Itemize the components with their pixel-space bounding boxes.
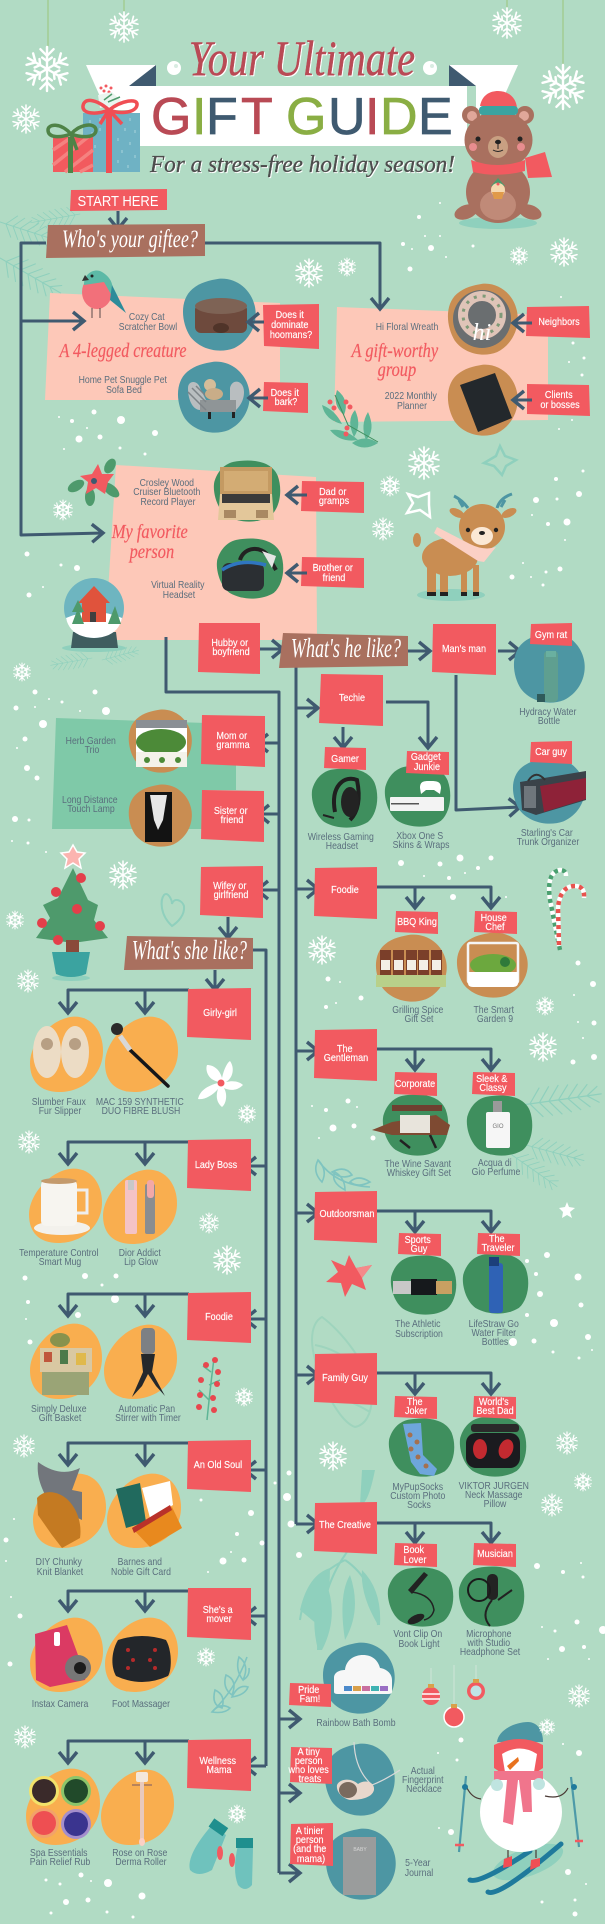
- tag: Sports Guy: Sports: [405, 1235, 431, 1246]
- caption: Starling's Car Trunk Organizer: Starling's Car: [521, 827, 573, 838]
- product: The Wine Savant Whiskey Gift Set: [372, 1072, 454, 1178]
- red box: Outdoorsman: [314, 1191, 377, 1243]
- red box: Does it bark?: [249, 382, 308, 413]
- red box: Does it dominate hoomans?: dominate: [271, 320, 308, 331]
- caption: Actual Fingerprint Necklace: Necklace: [406, 1783, 442, 1794]
- icon: holly sprig: [322, 390, 378, 448]
- caption: LifeStraw Go Water Filter Bottles: LifeStraw Go: [469, 1318, 519, 1329]
- icon: snowman on skis: [455, 1719, 583, 1893]
- tag: Gadget Junkie: Junkie: [414, 762, 440, 773]
- tag: START HERE: [70, 189, 167, 211]
- caption: Temperature Control Smart Mug: Temperature Control: [19, 1247, 98, 1258]
- heading: a gift-worthy group: group: [378, 359, 416, 380]
- caption: Herb Garden Trio: Herb Garden: [66, 735, 116, 746]
- tag: The Joker: Joker: [405, 1406, 428, 1417]
- red box: Family Guy: [314, 1353, 377, 1405]
- product: VIKTOR JURGEN Neck Massage Pillow: [459, 1396, 531, 1509]
- subtitle: For a stress-free holiday season!: [149, 152, 455, 178]
- title: GIFT GUIDE: G: [286, 88, 326, 146]
- title: GIFT GUIDE: F: [206, 88, 238, 146]
- caption: Hydracy Water Bottle: Hydracy Water: [519, 706, 576, 717]
- tag: Book Lover: Lover: [404, 1555, 427, 1566]
- tag: The Joker: The: [407, 1397, 423, 1408]
- red box: Girly-girl: Girly-girl: [203, 1008, 237, 1019]
- product: MyPupSocks Custom Photo Socks: [389, 1396, 454, 1510]
- caption: The Smart Garden 9: The Smart: [474, 1004, 514, 1015]
- red box: She's a mover: She's a: [203, 1605, 233, 1616]
- tag: A tiny person who loves treats: person: [295, 1756, 323, 1767]
- caption: Herb Garden Trio: Trio: [85, 744, 99, 755]
- heading: What's he like?: [279, 633, 408, 668]
- caption: Home Pet Snuggle Pet Sofa Bed: Home Pet Snuggle Pet: [79, 374, 167, 385]
- product: Crosley record player: [214, 460, 280, 522]
- tag: A tiny person who loves treats: treats: [299, 1774, 321, 1785]
- caption: Xbox One S Skins and Wraps: Xbox One S: [396, 830, 443, 841]
- product: Long Distance Touch Lamp: [129, 785, 192, 847]
- product: Microphone with Studio Headphone Set: [459, 1543, 524, 1657]
- tag: Car guy: Car guy: [535, 747, 567, 758]
- tag: Sleek and Classy: Sleek &: [476, 1074, 508, 1085]
- red box: Wellness Mama: Wellness: [199, 1756, 236, 1767]
- caption: Simply Deluxe Gift Basket: Gift Basket: [39, 1412, 82, 1423]
- product: Starling's Car Trunk Organizer: [513, 741, 586, 847]
- caption: Slumber Faux Fur Slipper: Fur Slipper: [39, 1105, 81, 1116]
- icon: mittens: [189, 1818, 253, 1889]
- caption: Vont Clip On Book Light: Vont Clip On: [393, 1628, 442, 1639]
- product: Slumber Faux Fur Slipper: [30, 1017, 103, 1116]
- red box: Clients or bosses: Clients: [545, 390, 573, 401]
- title: GIFT GUIDE: I: [365, 88, 379, 146]
- red box: Man's man: Man's man: [442, 644, 486, 655]
- caption: Hi Floral Wreath: Hi Floral Wreath: [376, 321, 438, 332]
- red box: Sister or friend: [201, 790, 264, 842]
- caption: Barnes and Noble Gift Card: Noble Gift Card: [111, 1566, 171, 1577]
- caption: Barnes and Noble Gift Card: Barnes and: [118, 1556, 162, 1567]
- caption: Automatic Pan Stirrer with Timer: Automatic Pan: [119, 1403, 175, 1414]
- red box: She's a mover: mover: [206, 1614, 232, 1625]
- tag: The Traveler: Traveler: [482, 1243, 515, 1254]
- caption: Vont Clip On Book Light: Book Light: [398, 1638, 440, 1649]
- caption: MyPupSocks Custom Photo Socks: Custom Photo: [390, 1490, 445, 1501]
- caption: Instax Camera: Instax Camera: [32, 1698, 89, 1709]
- tag: A tinier person (and the mama): (and the: [293, 1844, 326, 1855]
- heading: What's she like?: [124, 935, 253, 970]
- heading: Who's your giftee?: [46, 224, 205, 258]
- icon: red poinsettia: [326, 1255, 372, 1297]
- tag: A tinier person (and the mama): person: [296, 1835, 324, 1846]
- tag: START HERE: START HERE: [78, 193, 158, 210]
- caption: Wireless Gaming Headset: Headset: [326, 840, 359, 851]
- icon: candy canes: [549, 870, 584, 950]
- caption: Automatic Pan Stirrer with Timer: Stirrer with Timer: [115, 1412, 181, 1423]
- product: Instax Camera: [30, 1618, 103, 1709]
- icon: outline stars: [407, 446, 516, 517]
- caption: Crosley Wood Cruiser Bluetooth Record Player: Record Player: [140, 496, 196, 507]
- caption: Rose on Rose Derma Roller: Rose on Rose: [112, 1847, 167, 1858]
- heading: a 4-legged creature: A 4-legged creature: [58, 340, 187, 362]
- product: Rainbow Bath Bomb: [289, 1643, 396, 1728]
- caption: LifeStraw Go Water Filter Bottles: Bottles: [482, 1336, 509, 1347]
- icon: christmas tree: [36, 845, 108, 981]
- red box: Wifey or girlfriend: girlfriend: [214, 890, 248, 901]
- caption: Hydracy Water Bottle: Bottle: [538, 715, 560, 726]
- flow connectors: [21, 211, 520, 1873]
- tag: Gamer: Gamer: [331, 754, 360, 765]
- tag: Gadget Junkie: [406, 751, 449, 775]
- tag: World's Best Dad: World's: [479, 1397, 509, 1408]
- hanging ornament strings: [48, 0, 563, 1707]
- caption: Virtual Reality Headset: Virtual Reality: [151, 579, 205, 590]
- product: Herb Garden Trio: [129, 710, 192, 773]
- caption: VIKTOR JURGEN Neck Massage Pillow: Neck Massage: [465, 1489, 523, 1500]
- panel: mom or sister gifts: [52, 718, 236, 829]
- red box: Brother or friend: Brother or: [313, 563, 354, 574]
- red box: Foodie (he): Foodie: [331, 885, 359, 896]
- red box: Wellness Mama: Mama: [206, 1765, 232, 1776]
- red box: Mom or gramma: Mom or: [216, 731, 248, 742]
- tag: A tinier person (and the mama): A tinier: [296, 1826, 324, 1837]
- icon: white flower: [198, 1061, 243, 1107]
- red box: An Old Soul: An Old Soul: [194, 1460, 242, 1471]
- red box: Family Guy: Family Guy: [322, 1373, 368, 1384]
- heading: What's she like?: What's she like?: [132, 935, 247, 965]
- red box: The Creative: The Creative: [319, 1520, 371, 1531]
- caption: Home Pet Snuggle Pet Sofa Bed: Sofa Bed: [106, 384, 142, 395]
- caption: The Wine Savant Whiskey Gift Set: Whiskey Gift Set: [387, 1167, 451, 1178]
- tag: A tinier person (and the mama): mama): [297, 1854, 325, 1865]
- product: Acqua di Gio Perfume: [467, 1072, 532, 1177]
- tag: The Traveler: The: [489, 1234, 505, 1245]
- red box: Sister or friend: friend: [221, 815, 243, 826]
- tag: Pride Fam!: Fam!: [300, 1694, 320, 1705]
- product: 2022 Monthly Planner: [448, 365, 518, 436]
- red box: Clients or bosses: or bosses: [540, 400, 580, 411]
- red box: Neighbors: [513, 306, 590, 338]
- tag: Gym rat: Gym rat: [535, 630, 567, 641]
- banner ribbon: [86, 61, 518, 146]
- icon: heart outline: [162, 894, 184, 926]
- tag: Sleek and Classy: Classy: [479, 1083, 507, 1094]
- red box: Brother or friend: [287, 557, 364, 588]
- product: Simply Deluxe Gift Basket: [30, 1324, 102, 1423]
- product: Automatic Pan Stirrer with Timer: [104, 1325, 181, 1423]
- caption: 2022 Monthly Planner: Planner: [397, 400, 427, 411]
- caption: Actual Fingerprint Necklace: Actual: [411, 1765, 435, 1776]
- heading: a gift-worthy group: A gift-worthy: [351, 340, 439, 361]
- icon: berry sprig: [196, 1357, 221, 1420]
- caption: The Wine Savant Whiskey Gift Set: The Wine Savant: [384, 1158, 451, 1169]
- product: Wireless Gaming Headset: [308, 747, 377, 851]
- product: Temperature Control Smart Mug: [19, 1169, 102, 1267]
- red box: Outdoorsman: Outdoorsman: [320, 1209, 374, 1220]
- red box: Wellness Mama: [187, 1739, 251, 1791]
- caption: MAC 159 SYNTHETIC DUO FIBRE BLUSH: DUO FIBRE BLUSH: [102, 1105, 180, 1116]
- tag: World's Best Dad: [473, 1396, 516, 1419]
- caption: Dior Addict Lip Glow: Lip Glow: [124, 1256, 158, 1267]
- product: Barnes and Noble Gift Card: [107, 1474, 182, 1577]
- caption: Grilling Spice Gift Set: Gift Set: [405, 1013, 434, 1024]
- caption: Slumber Faux Fur Slipper: Slumber Faux: [32, 1096, 86, 1107]
- red box: Girly-girl: [187, 988, 251, 1040]
- product: Acqua di Gio Perfume: GIO: [492, 1124, 504, 1130]
- red box: Man's man: [432, 624, 496, 675]
- title: GIFT GUIDE: G: [151, 88, 191, 146]
- icon: hanging ornaments: [422, 1679, 485, 1727]
- red box: Mom or gramma: [201, 715, 265, 767]
- caption: MyPupSocks Custom Photo Socks: MyPupSocks: [392, 1481, 443, 1492]
- product: 5-Year Journal: BABY: [353, 1847, 367, 1853]
- caption: 5-Year Journal: Journal: [405, 1867, 433, 1878]
- caption: Starling's Car Trunk Organizer: Trunk Organizer: [517, 836, 579, 847]
- heading: my favorite person: My favorite: [111, 521, 188, 542]
- product: Hydracy Water Bottle: [514, 623, 585, 726]
- tag: House Chef: Chef: [485, 922, 505, 933]
- red box: Hubby or boyfriend: [198, 623, 260, 674]
- heading: What's he like?: What's he like?: [291, 633, 401, 663]
- caption: Microphone with Studio Headphone Set: Microphone: [466, 1628, 512, 1639]
- tag: Sports Guy: [398, 1233, 441, 1256]
- tag: House Chef: [474, 911, 517, 934]
- product: The Athletic Subscription: [391, 1233, 456, 1339]
- caption: Microphone with Studio Headphone Set: with Studio: [467, 1637, 510, 1648]
- red box: Dad or gramps: Dad or: [319, 487, 347, 498]
- tag: A tinier person (and the mama): [290, 1823, 333, 1866]
- product: 5-Year Journal: [290, 1823, 433, 1900]
- caption: Wireless Gaming Headset: Wireless Gaming: [308, 831, 374, 842]
- caption: Spa Essentials Pain Relief Rub: Pain Relief Rub: [30, 1856, 90, 1867]
- product: Virtual Reality Headset: [217, 538, 283, 599]
- red box: Techie: [319, 674, 383, 726]
- caption: The Smart Garden 9: Garden 9: [477, 1013, 513, 1024]
- red box: The Gentleman: [314, 1029, 377, 1081]
- caption: Rainbow Bath Bomb: Rainbow Bath Bomb: [316, 1717, 396, 1728]
- product: Foot Massager: [105, 1618, 178, 1709]
- icon: gift boxes: [48, 84, 140, 173]
- caption: VIKTOR JURGEN Neck Massage Pillow: VIKTOR JURGEN: [459, 1480, 529, 1491]
- caption: The Athletic Subscription: Subscription: [395, 1328, 443, 1339]
- red box: Foodie (she): [187, 1292, 251, 1343]
- title: GIFT GUIDE: U: [328, 88, 366, 146]
- tag: Book Lover: Book: [403, 1545, 424, 1556]
- title: GIFT GUIDE: T: [241, 88, 272, 146]
- caption: DIY Chunky Knit Blanket: Knit Blanket: [37, 1566, 84, 1577]
- title: GIFT GUIDE: E: [418, 88, 453, 146]
- red box: Hubby or boyfriend: boyfriend: [212, 647, 250, 658]
- icon: poinsettia: [66, 457, 122, 506]
- decorative pine and leaf branches: [0, 205, 603, 1713]
- product: Dior Addict Lip Glow: [103, 1170, 177, 1267]
- caption: Dior Addict Lip Glow: Dior Addict: [119, 1247, 161, 1258]
- caption: Long Distance Touch Lamp: Touch Lamp: [67, 803, 115, 814]
- icon: white star: [559, 1202, 575, 1218]
- tag: A tiny person who loves treats: who loves: [288, 1765, 329, 1776]
- red box: Dad or gramps: gramps: [319, 496, 349, 507]
- icon: bear with hat and scarf: [452, 91, 552, 229]
- title: GIFT GUIDE: I: [192, 88, 206, 146]
- caption: 2022 Monthly Planner: 2022 Monthly: [385, 390, 437, 401]
- product: Cozy Cat Scratcher Bowl: [183, 279, 256, 351]
- red box: She's a mover: [187, 1588, 251, 1640]
- tag: Pride Fam!: [289, 1683, 331, 1707]
- red box: Mom or gramma: gramma: [216, 740, 250, 751]
- tag: Gadget Junkie: Gadget: [411, 752, 441, 763]
- red box: Does it dominate hoomans?: Does it: [276, 310, 304, 321]
- tag: A tiny person who loves treats: [288, 1747, 332, 1785]
- caption: Microphone with Studio Headphone Set: Headphone Set: [460, 1646, 521, 1657]
- product: Spa Essentials Pain Relief Rub: [26, 1769, 100, 1867]
- caption: Acqua di Gio Perfume: Gio Perfume: [472, 1166, 520, 1177]
- red box: An Old Soul: [187, 1440, 251, 1492]
- product: Hi Floral Wreath: hi: [473, 320, 491, 346]
- red box: Wifey or girlfriend: [200, 866, 263, 918]
- red box: Does it dominate hoomans?: [248, 304, 319, 349]
- tag: A tiny person who loves treats: A tiny: [298, 1747, 320, 1758]
- tag: World's Best Dad: Best Dad: [476, 1406, 514, 1417]
- heading: my favorite person: person: [128, 541, 174, 562]
- tag: Corporate: Corporate: [395, 1079, 435, 1090]
- product: Actual Fingerprint Necklace: [288, 1742, 446, 1816]
- product: LifeStraw Go Water Filter Bottles: [463, 1233, 528, 1347]
- caption: VIKTOR JURGEN Neck Massage Pillow: Pillow: [484, 1498, 507, 1509]
- tag: The Joker: [394, 1396, 437, 1419]
- caption: Simply Deluxe Gift Basket: Simply Deluxe: [31, 1403, 87, 1414]
- product: Grilling Spice Gift Set: [376, 911, 447, 1024]
- product: Rose on Rose Derma Roller: [101, 1770, 174, 1867]
- title: GIFT GUIDE: D: [380, 88, 418, 146]
- tag: Sports Guy: Guy: [411, 1244, 427, 1255]
- icon: snow globe: [49, 578, 140, 673]
- caption: Grilling Spice Gift Set: Grilling Spice: [392, 1004, 443, 1015]
- panel: a 4-legged creature: [45, 293, 280, 400]
- caption: Foot Massager: Foot Massager: [112, 1698, 170, 1709]
- caption: The Athletic Subscription: The Athletic: [395, 1318, 441, 1329]
- caption: DIY Chunky Knit Blanket: DIY Chunky: [36, 1556, 82, 1567]
- caption: MAC 159 SYNTHETIC DUO FIBRE BLUSH: MAC 159 SYNTHETIC: [96, 1096, 184, 1107]
- panel: my favorite person: [105, 465, 317, 640]
- caption: Spa Essentials Pain Relief Rub: Spa Essentials: [30, 1847, 88, 1858]
- product: The Smart Garden 9: [457, 911, 528, 1024]
- caption: Crosley Wood Cruiser Bluetooth Record Player: Cruiser Bluetooth: [133, 486, 200, 497]
- red box: Sister or friend: Sister or: [214, 806, 248, 817]
- product: MAC 159 Synthetic Duo Fibre Blush: [96, 1017, 186, 1116]
- caption: 5-Year Journal: 5-Year: [405, 1857, 430, 1868]
- icon: parrot: [82, 271, 126, 318]
- red box: Techie: Techie: [339, 693, 365, 704]
- red box: Lady Boss: Lady Boss: [195, 1160, 237, 1171]
- caption: Cozy Cat Scratcher Bowl: Cozy Cat: [129, 311, 165, 322]
- tag: Musician: Musician: [477, 1549, 513, 1560]
- caption: Long Distance Touch Lamp: Long Distance: [62, 794, 118, 805]
- red box: Wifey or girlfriend: Wifey or: [213, 881, 247, 892]
- product: Home Pet Snuggle Pet Sofa Bed: [178, 362, 250, 433]
- red box: Does it bark?: Does it: [271, 388, 299, 399]
- red box: Foodie (she): Foodie: [205, 1312, 233, 1323]
- red box: Neighbors: Neighbors: [538, 317, 580, 328]
- red box: The Creative: [314, 1502, 377, 1554]
- red box: The Gentleman: Gentleman: [324, 1053, 368, 1064]
- tag: The Traveler: [477, 1233, 520, 1256]
- product: Xbox One S Skins and Wraps: [385, 751, 450, 850]
- panel: a gift-worthy group: [334, 307, 548, 422]
- red box: Brother or friend: friend: [323, 573, 345, 584]
- product: DIY Chunky Knit Blanket: [33, 1462, 106, 1577]
- red box: Dad or gramps: [287, 481, 364, 513]
- caption: Virtual Reality Headset: Headset: [163, 589, 196, 600]
- product: Vont Clip On Book Light: [388, 1543, 453, 1649]
- caption: Temperature Control Smart Mug: Smart Mug: [39, 1256, 81, 1267]
- red box: Lady Boss: [187, 1139, 251, 1191]
- tag: BBQ King: BBQ King: [397, 917, 437, 928]
- red box: The Gentleman: The: [337, 1044, 353, 1055]
- heading: Who's your giftee?: Who's your giftee?: [62, 226, 198, 253]
- red box: Hubby or boyfriend: Hubby or: [211, 638, 249, 649]
- caption: MyPupSocks Custom Photo Socks: Socks: [407, 1499, 431, 1510]
- red box: Does it dominate hoomans?: hoomans?: [270, 330, 312, 341]
- red box: Does it bark?: bark?: [275, 397, 297, 408]
- caption: Cozy Cat Scratcher Bowl: Scratcher Bowl: [119, 321, 177, 332]
- product: Hi Floral Wreath: [448, 284, 518, 355]
- tag: Sleek and Classy: [472, 1072, 515, 1096]
- tag: Pride Fam!: Pride: [298, 1685, 319, 1696]
- caption: Crosley Wood Cruiser Bluetooth Record Player: Crosley Wood: [140, 477, 194, 488]
- icon: deer with scarf: [413, 494, 518, 601]
- red box: Clients or bosses: [513, 384, 590, 416]
- tag: House Chef: House: [481, 913, 507, 924]
- tag: Book Lover: [394, 1543, 437, 1567]
- caption: Actual Fingerprint Necklace: Fingerprint: [402, 1774, 444, 1785]
- caption: Rose on Rose Derma Roller: Derma Roller: [115, 1856, 167, 1867]
- title: Your Ultimate: Your Ultimate: [189, 30, 415, 86]
- caption: LifeStraw Go Water Filter Bottles: Water Filter: [472, 1327, 516, 1338]
- red box: Foodie (he): [314, 867, 377, 919]
- caption: Acqua di Gio Perfume: Acqua di: [478, 1157, 512, 1168]
- caption: Xbox One S Skins and Wraps: Skins & Wraps: [393, 839, 450, 850]
